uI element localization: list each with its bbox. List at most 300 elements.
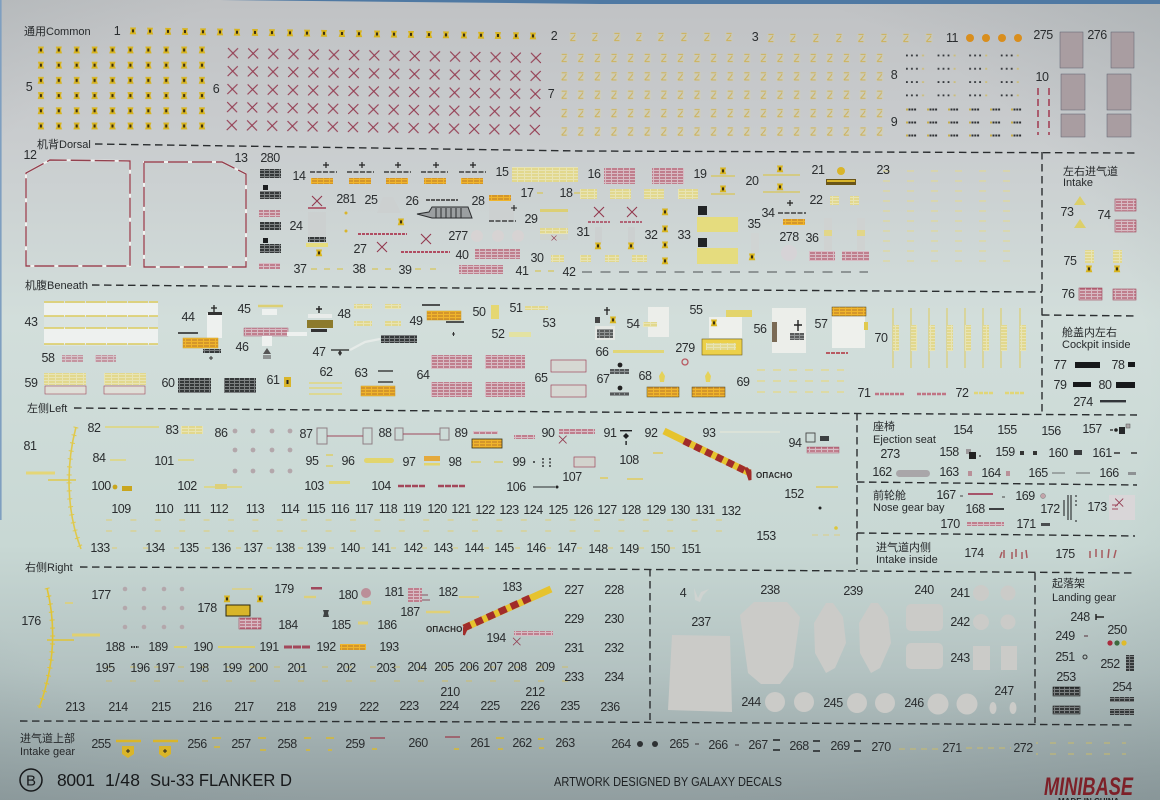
numbers: right: 224 — [439, 699, 459, 713]
numbers: intake gear — [91, 736, 1033, 755]
numbers: right: 214 — [108, 700, 128, 714]
dash rows 109 133 — [100, 515, 842, 548]
numbers: intake gear: 266 — [708, 738, 728, 752]
decals 53 — [595, 307, 616, 340]
numbers: dorsal: 28 — [472, 194, 485, 208]
numbers: right: 193 — [379, 640, 399, 654]
decals 64 — [431, 355, 525, 397]
numbers: intake gear: 256 — [187, 737, 207, 751]
decals 18 — [580, 189, 698, 199]
decals 256-263 — [212, 737, 544, 750]
circles 277 — [471, 230, 524, 242]
heading: Common: 通用Common — [24, 25, 91, 38]
numbers: landing gear: 249 — [1055, 629, 1075, 643]
numbers: right: 232 — [604, 641, 624, 655]
numbers: dorsal — [24, 148, 890, 279]
numbers: dorsal: 15 — [496, 165, 509, 179]
numbers: cockpit: 274 — [1073, 395, 1093, 409]
column 280 — [259, 169, 281, 269]
numbers: dorsal: 36 — [806, 231, 819, 245]
icon: circled B — [20, 769, 42, 791]
decals 179-187 — [304, 587, 479, 623]
numbers: beneath: 52 — [492, 327, 505, 341]
numbers: right: 198 — [189, 661, 209, 675]
numbers: common: 5 — [26, 80, 33, 94]
numbers: dorsal: 22 — [810, 193, 823, 207]
numbers: right: 190 — [193, 640, 213, 654]
numbers: left: 111 — [183, 502, 201, 516]
numbers: left: 132 — [721, 504, 741, 518]
marks 86 — [233, 429, 292, 473]
numbers: left: 114 — [281, 502, 300, 516]
numbers: intake gear: 264 — [611, 737, 631, 751]
shapes 240 — [906, 604, 943, 669]
decals 42 — [580, 255, 647, 262]
decal 56 — [772, 308, 806, 353]
panel: cockpit inside: Cockpit inside — [1062, 339, 1130, 351]
numbers: right: 205 — [434, 660, 454, 674]
numbers: intake: 74 — [1098, 208, 1111, 222]
numbers: landing gear: 254 — [1112, 680, 1132, 694]
panel: landing gear — [1052, 577, 1134, 715]
decal 24 — [306, 196, 328, 256]
numbers: left: 99 — [513, 455, 526, 469]
heading: ejection seat: 座椅 — [873, 419, 895, 433]
numbers: left: 89 — [455, 426, 468, 440]
marks 265 266 — [695, 744, 739, 745]
numbers: right: 194 — [486, 631, 506, 645]
decal 44 — [178, 305, 222, 360]
crosses 31 with strips — [588, 207, 642, 249]
numbers: right: 206 — [459, 660, 479, 674]
grid 8: small dot groups — [905, 49, 1031, 102]
numbers: right: 219 — [317, 700, 337, 714]
decal 178 — [224, 589, 263, 629]
numbers: beneath: 44 — [182, 310, 195, 324]
heading: intake inside: 进气道内侧 — [876, 540, 931, 554]
panel: intake gear row: Intake gear — [20, 746, 75, 758]
numbers: nose gear bay: 171 — [1016, 517, 1036, 531]
numbers: ejection seat: 165 — [1028, 466, 1048, 480]
numbers: left: 83 — [166, 423, 179, 437]
numbers: beneath: 54 — [627, 317, 640, 331]
numbers: dorsal: 281 — [336, 192, 356, 206]
numbers: ejection seat: 157 — [1082, 422, 1102, 436]
numbers: common: 3 — [752, 30, 759, 44]
decals 48 — [354, 304, 401, 326]
grid 69 — [754, 365, 844, 398]
numbers: nose gear bay: 168 — [965, 502, 985, 516]
numbers: beneath: 65 — [535, 371, 548, 385]
decal 57 — [826, 307, 866, 353]
numbers: dorsal: 27 — [354, 242, 367, 256]
numbers: right: 204 — [407, 660, 427, 674]
numbers: landing gear — [1055, 610, 1132, 694]
decals 82 83 84 100 101 102 — [105, 426, 242, 491]
panel: common decals — [32, 27, 1134, 142]
numbers: common: 9 — [891, 115, 898, 129]
numbers: dorsal: 21 — [812, 163, 825, 177]
numbers: right: 191 — [259, 640, 279, 654]
numbers: intake gear: 259 — [345, 737, 365, 751]
numbers: left: 143 — [433, 541, 453, 555]
crosses 27 with red text — [358, 234, 450, 252]
numbers: common: 7 — [548, 87, 555, 101]
nose gear decals — [960, 494, 1135, 526]
product name — [57, 770, 292, 790]
numbers: right: 197 — [155, 661, 175, 675]
numbers: white shapes: 244 — [741, 695, 761, 709]
scale arc 176 — [39, 588, 100, 708]
numbers: right: 189 — [148, 640, 168, 654]
numbers: left — [24, 421, 804, 556]
shape 238 — [740, 602, 800, 684]
panel: nose gear bay — [873, 488, 1135, 531]
icon: circled B: B — [26, 772, 36, 790]
decals 76 — [1079, 288, 1136, 300]
numbers: intake gear: 269 — [830, 739, 850, 753]
numbers: cockpit: 80 — [1099, 378, 1112, 392]
panel: right side decals — [39, 587, 580, 708]
decals 19 20 — [711, 166, 800, 194]
numbers: left: 128 — [621, 503, 641, 517]
numbers: right: 213 — [65, 700, 85, 714]
numbers: right: 199 — [222, 661, 242, 675]
panel: intake inside: Intake inside — [876, 554, 938, 566]
numbers: dorsal: 12 — [24, 148, 37, 162]
numbers: intake inside — [964, 546, 1075, 561]
numbers: left: 94 — [789, 436, 802, 450]
numbers: left: 137 — [243, 541, 263, 555]
numbers: beneath: 66 — [596, 345, 609, 359]
numbers: dorsal: 35 — [748, 217, 761, 231]
numbers: nose gear bay: 172 — [1040, 502, 1060, 516]
numbers: intake: 75 — [1064, 254, 1077, 268]
numbers: left: 113 — [246, 502, 265, 516]
numbers: landing gear: 250 — [1107, 623, 1127, 637]
numbers: intake gear: 263 — [555, 736, 575, 750]
numbers: left: 115 — [307, 502, 326, 516]
numbers: left: 129 — [646, 503, 666, 517]
numbers: nose gear bay: 167 — [936, 488, 956, 502]
numbers: dorsal: 25 — [365, 193, 378, 207]
numbers: left: 130 — [670, 503, 690, 517]
numbers: right: 208 — [507, 660, 527, 674]
decal 28 — [489, 195, 517, 221]
grid 272 — [1036, 738, 1126, 760]
numbers: right: 183 — [502, 580, 522, 594]
numbers: white shapes: 242 — [950, 615, 970, 629]
heading: landing gear: 起落架 — [1052, 577, 1085, 590]
numbers: right: 233 — [564, 670, 584, 684]
numbers: ejection seat: 166 — [1099, 466, 1119, 480]
panel: left side decals — [26, 426, 842, 549]
icons 11: orange trefoils — [966, 34, 1022, 42]
numbers: white shapes: 246 — [904, 696, 924, 710]
numbers: common: 1 — [114, 24, 121, 38]
numbers: left: 97 — [403, 455, 416, 469]
numbers: beneath: 62 — [320, 365, 333, 379]
numbers: dorsal: 16 — [588, 167, 601, 181]
panel: ejection seat — [872, 419, 1137, 480]
decal 21 22 — [826, 167, 859, 205]
decal 26: tank drawing — [417, 200, 472, 218]
decals 74 — [1115, 199, 1136, 232]
black decals — [1073, 362, 1135, 402]
numbers: right: 229 — [564, 612, 584, 626]
numbers: left: 107 — [562, 470, 582, 484]
numbers: left: 122 — [475, 503, 495, 517]
numbers: left: 131 — [695, 503, 715, 517]
numbers: common: 11 — [946, 31, 959, 45]
numbers: intake — [1061, 205, 1111, 301]
numbers: left: 144 — [464, 541, 484, 555]
decal 29 — [540, 209, 568, 240]
decals 35 36 278 — [749, 218, 869, 261]
numbers: beneath: 71 — [858, 386, 871, 400]
numbers: beneath: 43 — [25, 315, 38, 329]
numbers: left: 109 — [111, 502, 131, 516]
numbers: left: 142 — [403, 541, 423, 555]
numbers: left: 112 — [210, 502, 229, 516]
panel: landing gear: Landing gear — [1052, 592, 1117, 604]
numbers: left: 110 — [155, 502, 174, 516]
numbers: right: 181 — [384, 585, 404, 599]
numbers: intake gear: 270 — [871, 740, 891, 754]
numbers: right: 217 — [234, 700, 254, 714]
numbers: left: 134 — [145, 541, 165, 555]
decal 49 — [381, 305, 464, 343]
numbers: right: 226 — [520, 699, 540, 713]
white decal 43 — [44, 301, 158, 346]
numbers: beneath: 49 — [410, 314, 423, 328]
decals 58 — [62, 355, 116, 362]
decals 33 — [697, 206, 738, 264]
numbers: ejection seat — [872, 422, 1119, 480]
numbers: white shapes: 243 — [950, 651, 970, 665]
numbers: left: 104 — [371, 479, 391, 493]
decals 65 — [551, 360, 586, 397]
numbers: right: 203 — [376, 661, 396, 675]
stripe 92 — [664, 431, 750, 480]
numbers: right: 177 — [91, 588, 111, 602]
numbers: ejection seat: 163 — [939, 465, 959, 479]
numbers: dorsal: 38 — [353, 262, 366, 276]
numbers: right: 200 — [248, 661, 268, 675]
numbers: right: 187 — [400, 605, 420, 619]
stripe 183 — [464, 589, 551, 635]
numbers: left: 108 — [619, 453, 639, 467]
numbers: left: 127 — [597, 503, 617, 517]
numbers: intake: 73 — [1061, 205, 1074, 219]
numbers: left: 81 — [24, 439, 37, 453]
numbers: left: 120 — [427, 502, 447, 516]
numbers: left: 135 — [179, 541, 199, 555]
numbers: dorsal: 26 — [406, 194, 419, 208]
numbers: left: 152 — [784, 487, 804, 501]
numbers: right: 215 — [151, 700, 171, 714]
numbers: right: 216 — [192, 700, 212, 714]
numbers: intake gear: 272 — [1013, 741, 1033, 755]
numbers: dorsal: 17 — [521, 186, 534, 200]
numbers: right: 195 — [95, 661, 115, 675]
numbers: right: 180 — [338, 588, 358, 602]
circles 244 245 246 247 — [765, 692, 1016, 714]
numbers: white shapes: 238 — [760, 583, 780, 597]
numbers: intake gear: 262 — [512, 736, 532, 750]
numbers: left: 153 — [756, 529, 776, 543]
numbers: intake gear: 257 — [231, 737, 251, 751]
numbers: left: 87 — [300, 427, 313, 441]
grid 6: red crosses — [222, 44, 546, 139]
numbers: left: 146 — [526, 541, 546, 555]
heading: intake gear: 进气道上部 — [20, 731, 75, 745]
icon 91 — [620, 430, 632, 445]
numbers: white shapes: 247 — [994, 684, 1014, 698]
numbers: beneath: 60 — [162, 376, 175, 390]
row 1: gold markers — [130, 27, 536, 39]
numbers: right: 235 — [560, 699, 580, 713]
numbers: left: 101 — [154, 454, 174, 468]
numbers: dorsal: 34 — [762, 206, 775, 220]
numbers: intake gear: 260 — [408, 736, 428, 750]
numbers: right: 218 — [276, 700, 296, 714]
numbers: right: 185 — [331, 618, 351, 632]
numbers: beneath: 68 — [639, 369, 652, 383]
panel: intake — [1061, 164, 1136, 301]
decals 59 — [44, 373, 146, 394]
numbers: right: 210 — [440, 685, 460, 699]
panel: intake: Intake — [1063, 177, 1093, 189]
numbers: beneath: 50 — [473, 305, 486, 319]
panel: ejection seat: Ejection seat — [873, 434, 936, 446]
numbers: ejection seat: 154 — [953, 423, 973, 437]
numbers: right: 236 — [600, 700, 620, 714]
numbers: landing gear: 252 — [1100, 657, 1120, 671]
decals 45 46 — [244, 306, 307, 359]
numbers: beneath: 64 — [417, 368, 430, 382]
numbers: beneath: 67 — [597, 372, 610, 386]
numbers: intake gear: 255 — [91, 737, 111, 751]
decals 70: vertical lines — [893, 308, 1026, 368]
numbers: dorsal: 24 — [290, 219, 303, 233]
heading: Dorsal: 机背Dorsal — [37, 137, 91, 151]
decal center block — [307, 306, 333, 332]
credit line: ARTWORK DESIGNED BY GALAXY DECALS — [554, 775, 782, 789]
decals 16 — [604, 168, 684, 184]
numbers: left: 138 — [275, 541, 295, 555]
small label row 42 — [582, 271, 868, 273]
numbers: right: 225 — [480, 699, 500, 713]
numbers: white shapes: 237 — [691, 615, 711, 629]
numbers: right: 179 — [274, 582, 294, 596]
numbers: left: 118 — [379, 502, 398, 516]
numbers: beneath: 55 — [690, 303, 703, 317]
numbers: ejection seat: 156 — [1041, 424, 1061, 438]
numbers: beneath: 279 — [675, 341, 695, 355]
panel: white shapes — [668, 583, 1017, 714]
panel: beneath decals — [44, 301, 1026, 398]
numbers: dorsal: 30 — [531, 251, 544, 265]
decal 55 279 — [682, 310, 752, 365]
numbers: dorsal: 42 — [563, 265, 576, 279]
heading: Right: 右侧Right — [25, 560, 73, 574]
numbers: left: 151 — [681, 542, 701, 556]
decals 50 51 52 — [491, 305, 548, 337]
panel: intake gear row — [20, 731, 1126, 760]
numbers: dorsal: 39 — [399, 263, 412, 277]
numbers: intake gear: 261 — [470, 736, 490, 750]
numbers: left: 116 — [331, 502, 350, 516]
decal 47 — [331, 339, 380, 356]
numbers: cockpit — [1054, 358, 1125, 409]
numbers: beneath: 53 — [543, 316, 556, 330]
heading: nose gear bay: 前轮舱 — [873, 488, 906, 502]
numbers: dorsal: 18 — [560, 186, 573, 200]
grid 5: gold markers — [32, 42, 211, 134]
numbers: left: 150 — [650, 542, 670, 556]
numbers: intake gear: 267 — [748, 738, 768, 752]
heading: Left: 左侧Left — [27, 402, 67, 415]
numbers: ejection seat: 162 — [872, 465, 892, 479]
decals 66 67 — [610, 350, 664, 396]
stripe text: ОПАСНО — [756, 471, 793, 480]
markers 32 — [662, 208, 668, 264]
circles 264 — [637, 741, 658, 747]
numbers: nose gear bay: 170 — [940, 517, 960, 531]
numbers: left: 100 — [91, 479, 111, 493]
numbers: dorsal: 32 — [645, 228, 658, 242]
numbers: dorsal: 20 — [746, 174, 759, 188]
numbers: white shapes: 4 — [680, 586, 687, 600]
section dividers — [20, 144, 1137, 725]
numbers: right: 196 — [130, 661, 150, 675]
tiny red vertical text 10 — [1038, 88, 1049, 135]
numbers: common: 10 — [1036, 70, 1049, 84]
numbers: right: 178 — [197, 601, 217, 615]
decal 25 — [377, 197, 404, 225]
numbers: dorsal: 19 — [694, 167, 707, 181]
numbers: right: 176 — [21, 614, 41, 628]
decal 4 — [694, 588, 709, 602]
outlines 87 88 — [317, 428, 449, 444]
numbers: right — [21, 580, 624, 714]
decals 60 — [178, 378, 256, 393]
numbers: beneath: 59 — [25, 376, 38, 390]
grid 23 — [880, 166, 1026, 264]
numbers: common: 276 — [1087, 28, 1107, 42]
numbers: left: 125 — [548, 503, 568, 517]
footer title — [20, 769, 292, 791]
numbers: beneath: 61 — [267, 373, 280, 387]
numbers: left: 98 — [449, 455, 462, 469]
group 14 — [310, 162, 486, 184]
shape 237 — [668, 635, 732, 712]
row 2-3: gold hooks — [570, 32, 932, 42]
numbers: landing gear: 248 — [1070, 610, 1090, 624]
numbers: dorsal: 13 — [235, 151, 248, 165]
dashes 37 38 39 41 17 18 — [311, 193, 580, 271]
numbers: right: 228 — [604, 583, 624, 597]
numbers: dorsal: 29 — [525, 212, 538, 226]
numbers: common — [26, 24, 1107, 129]
numbers: beneath: 58 — [42, 351, 55, 365]
heading: Beneath: 机腹Beneath — [25, 278, 88, 292]
numbers: beneath: 57 — [815, 317, 828, 331]
landing gear decals — [1053, 614, 1134, 715]
numbers: dorsal: 40 — [456, 248, 469, 262]
numbers: nose gear bay: 169 — [1015, 489, 1035, 503]
